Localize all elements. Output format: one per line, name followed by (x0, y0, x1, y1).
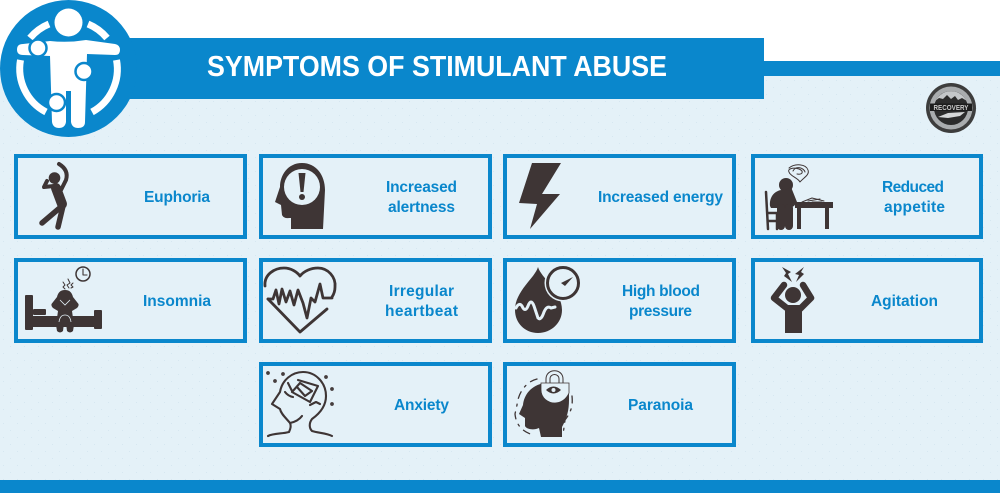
label: Reduced (882, 179, 944, 196)
icon: head with padlock eye (515, 371, 572, 437)
panel: insomnia (16, 260, 245, 341)
panel: agitation (753, 260, 981, 341)
label: pressure (629, 303, 692, 320)
label: Paranoia (628, 397, 693, 414)
label: heartbeat (385, 303, 458, 320)
icon: dancing figure (42, 164, 67, 227)
icon: agitated person (774, 267, 811, 333)
label: Irregular (389, 283, 454, 300)
logo badge: RECOVERY (934, 105, 969, 112)
label: High blood (622, 283, 700, 300)
panel: paranoia (505, 364, 734, 445)
label: Agitation (871, 293, 938, 310)
icon: sleepless person on bed (25, 267, 102, 332)
panel: increased alertness (261, 156, 490, 237)
label: alertness (388, 199, 455, 216)
icon: body with pain points (0, 0, 137, 137)
label: Anxiety (394, 397, 449, 414)
icon: head with exclamation (275, 163, 325, 229)
icon: heart with ecg (265, 268, 335, 332)
logo badge (926, 83, 976, 133)
footer band (0, 480, 1000, 493)
icon: head with tangled thoughts (267, 372, 333, 436)
panel: high blood pressure (505, 260, 734, 341)
label: Euphoria (144, 189, 210, 206)
label: appetite (884, 199, 945, 216)
panel: euphoria (16, 156, 245, 237)
icon: lightning bolt (519, 163, 561, 229)
title: SYMPTOMS OF STIMULANT ABUSE (207, 51, 667, 83)
panel: increased energy (505, 156, 734, 237)
panel: anxiety (261, 364, 490, 445)
label: Increased energy (598, 189, 723, 206)
icon: blood drop and gauge (515, 264, 582, 333)
header band (60, 38, 1000, 99)
icon: person at table (766, 165, 833, 230)
panel: reduced appetite (753, 156, 981, 237)
panel: irregular heartbeat (261, 260, 490, 341)
label: Increased (386, 179, 457, 196)
label: Insomnia (143, 293, 211, 310)
